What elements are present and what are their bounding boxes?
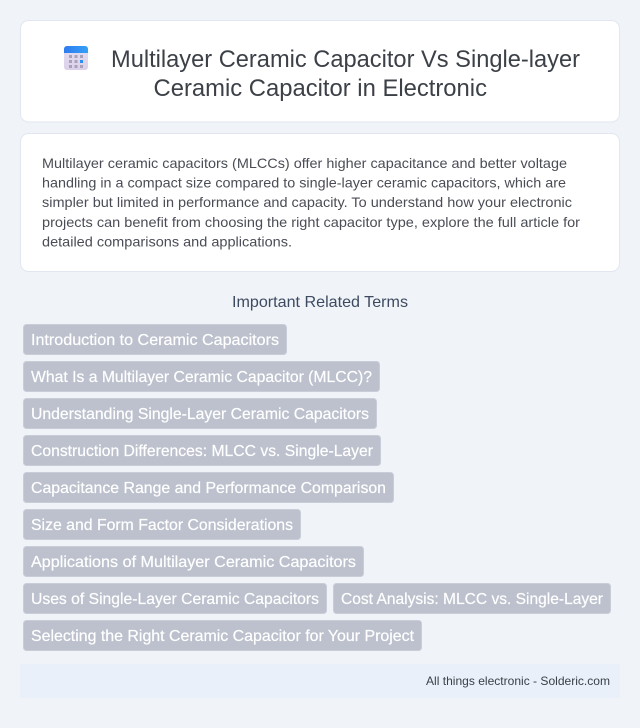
tag: cost [334, 584, 610, 614]
tag: construction [24, 436, 380, 466]
tag: introduction: Introduction to Ceramic Capacitors [31, 332, 279, 349]
title: Ceramic Capacitor in Electronic [154, 75, 487, 102]
tag: capacitance: Capacitance Range and Performance Comparison [31, 480, 386, 497]
icon: calendar [64, 46, 88, 70]
text block: description: handling in a compact size compared to single-layer ceramic capacitors, which are [42, 175, 566, 191]
tag: cost: Cost Analysis: MLCC vs. Single-Layer [341, 591, 604, 608]
tag: size [24, 510, 300, 540]
panel: description card [20, 134, 620, 272]
title [111, 46, 580, 102]
tag: capacitance [24, 472, 394, 502]
footer [20, 664, 620, 698]
heading: related terms: Important Related Terms [232, 294, 408, 311]
tag: applications [24, 546, 364, 576]
tag: selecting [24, 620, 422, 650]
tag: size: Size and Form Factor Considerations [31, 517, 293, 534]
tag: single-layer [24, 398, 376, 428]
tag: single-layer: Understanding Single-Layer Ceramic Capacitors [31, 406, 369, 423]
text block: description: detailed comparisons and applications. [42, 233, 292, 249]
text block: description: projects can benefit from choosing the right capacitor type, explore the full article for [42, 214, 580, 230]
tag: what is MLCC [24, 362, 380, 392]
tag: selecting: Selecting the Right Ceramic Capacitor for Your Project [31, 628, 415, 645]
tag: uses: Uses of Single-Layer Ceramic Capacitors [31, 591, 319, 608]
tag: construction: Construction Differences: MLCC vs. Single-Layer [31, 443, 374, 460]
text block: description: Multilayer ceramic capacitors (MLCCs) offer higher capacitance and better voltage [42, 155, 567, 171]
title: Multilayer Ceramic Capacitor Vs Single-layer [111, 46, 580, 73]
footer: All things electronic - Solderic.com [426, 674, 610, 688]
panel: header card [20, 20, 620, 122]
tag: uses [24, 584, 326, 614]
text block: description: simpler but limited in performance and capacity. To understand how your electronic [42, 194, 572, 210]
tag: introduction [24, 324, 286, 354]
text block: description [42, 155, 580, 249]
tag: what is MLCC: What Is a Multilayer Ceramic Capacitor (MLCC)? [31, 369, 372, 386]
tag: applications: Applications of Multilayer Ceramic Capacitors [31, 554, 356, 571]
